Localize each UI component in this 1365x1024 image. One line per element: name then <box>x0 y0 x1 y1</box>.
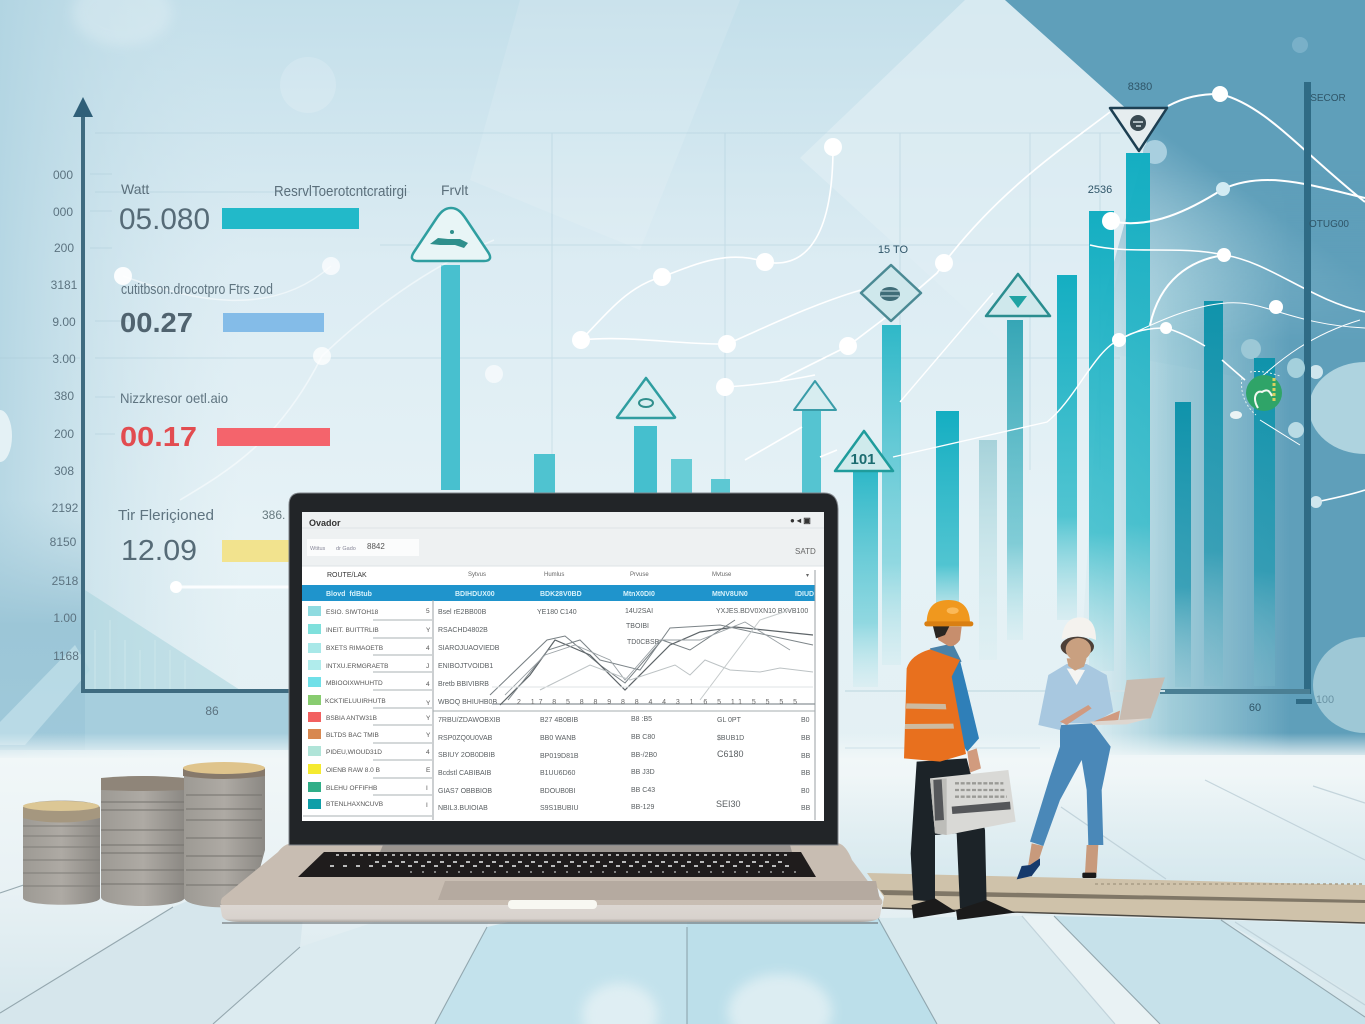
chart number labels: OTUG00 <box>1309 219 1349 230</box>
left axis labels: 3.00 <box>52 352 76 366</box>
table left rows: BSBIA ANTW31B <box>326 715 377 722</box>
table left rows: BLTDS BAC TMIB <box>326 732 379 739</box>
table right rows: S9S1BUBIU <box>540 805 579 812</box>
icon: triangle marker small <box>617 378 675 418</box>
metric: second row: 00.27 <box>120 307 193 338</box>
left axis labels: 1168 <box>53 649 79 663</box>
laptop screen: Wtitus dr Gado <box>310 546 356 552</box>
chart number labels <box>878 81 1349 714</box>
coin stacks <box>23 762 265 907</box>
table right rows: ENIBOJTVOIDB1 <box>438 663 493 670</box>
table right rows: B27 4B0BIB <box>540 717 578 724</box>
metric: fourth row <box>118 507 290 567</box>
laptop screen: SATD <box>795 547 816 556</box>
table right rows: B0 <box>801 788 810 795</box>
icon: triangle with heart <box>986 274 1050 316</box>
icon: outline triangle <box>794 381 836 410</box>
table right rows: BB C43 <box>631 787 655 794</box>
metric: second row <box>120 281 324 338</box>
laptop screen: 8842 <box>367 542 385 551</box>
table right rows: B8 :B5 <box>631 716 652 723</box>
metric: first row: Watt <box>121 181 149 197</box>
left axis labels: 3181 <box>51 278 78 292</box>
table right rows: BB C80 <box>631 734 655 741</box>
laptop screen: ● ◂ ▣ <box>790 516 811 525</box>
left bar charts vertical <box>441 265 821 494</box>
table left rows: J <box>426 663 429 670</box>
right bar charts vertical <box>853 153 1275 687</box>
table right rows: NBIL3.BUIOIAB <box>438 805 488 812</box>
laptop lid <box>289 493 838 845</box>
left axis labels <box>50 168 219 718</box>
laptop screen: Sytvus <box>468 572 486 578</box>
metric: third row: Nizzkresor oetl.aio <box>120 390 228 406</box>
table header: MtNV8UN0 <box>712 591 748 598</box>
left axis labels: 000 <box>53 205 73 219</box>
left axis labels: 200 <box>54 427 74 441</box>
laptop <box>220 493 882 923</box>
metric: first row: 05.080 <box>119 203 210 236</box>
left axis labels: 380 <box>54 389 74 403</box>
table left rows: BTENLHAXNCUVB <box>326 801 383 808</box>
table right rows: YXJES.BDV0XN10 BXVB100 <box>716 608 808 615</box>
icon: 101 triangle: 101 <box>850 451 876 468</box>
table header: MtnX0DI0 <box>623 591 655 598</box>
table right rows: Bretb BBIVIBRB <box>438 681 489 688</box>
table right rows: BB <box>801 805 811 812</box>
metric: fourth row: Tir Fleriçioned <box>118 507 214 524</box>
left axis labels: 308 <box>54 464 74 478</box>
laptop screen: ROUTE/LAK <box>327 572 367 579</box>
icon: inverted triangle marker <box>1110 108 1167 151</box>
laptop screen: Humlus <box>544 572 564 578</box>
table left rows: KCKTIELUUIRHUTB <box>325 698 386 705</box>
metric: second row: cutitbson.drocotpro Ftrs zod <box>121 281 273 298</box>
table right rows: B0 <box>801 717 810 724</box>
chart number labels: 60 <box>1249 702 1261 714</box>
left axis labels: 2518 <box>52 574 79 588</box>
table header: IDIUD <box>795 591 814 598</box>
chart number labels: 15 TO <box>878 244 909 256</box>
table right rows: Bsel rE2BB00B <box>438 609 487 616</box>
table right rows <box>438 608 811 812</box>
table left rows: Y <box>426 627 431 634</box>
laptop screen: Prvuse <box>630 572 649 578</box>
table right rows: BB <box>801 735 811 742</box>
left axis <box>73 97 291 693</box>
table right rows: C6180 <box>717 749 744 759</box>
icon: triangle marker large <box>412 208 490 261</box>
table right rows: $BUB1D <box>717 735 744 742</box>
table right rows: 7RBU/ZDAWOBXIB <box>438 717 501 724</box>
right axis <box>845 82 1312 704</box>
left axis labels: 1.00 <box>53 611 77 625</box>
chart number labels: 100 <box>1316 694 1334 706</box>
table left rows: I <box>426 802 428 809</box>
metric: third row <box>120 390 330 452</box>
background wall <box>0 0 1365 760</box>
laptop screen <box>302 512 824 821</box>
table left rows: BXETS RIMAOETB <box>326 645 383 652</box>
table left rows: 5 <box>426 608 430 615</box>
table left rows: 4 <box>426 645 430 652</box>
metric: first row: Frvlt <box>441 182 468 198</box>
table left rows: E <box>426 767 431 774</box>
table right rows: TD0CBSB <box>627 639 660 646</box>
table left rows: INEIT. BUITTRLIB <box>326 627 379 634</box>
table right rows: 14U2SAI <box>625 608 653 615</box>
worker: man with orange vest <box>904 600 1016 920</box>
table right rows: Bcdstl CABIBAIB <box>438 770 492 777</box>
table left rows: 4 <box>426 681 430 688</box>
laptop screen: Ovador <box>309 518 341 528</box>
laptop screen: ▾ <box>806 573 809 579</box>
table right rows: BB0 WANB <box>540 735 576 742</box>
table right rows: BB-129 <box>631 804 654 811</box>
icon: diamond marker <box>861 265 921 321</box>
laptop base <box>220 843 882 923</box>
left axis labels: 8150 <box>50 535 77 549</box>
table right rows: TBOIBI <box>626 623 649 630</box>
metric: fourth row: 12.09 <box>121 535 197 567</box>
table right rows: BP019D81B <box>540 753 579 760</box>
table right rows: B1UU6D60 <box>540 770 576 777</box>
floor <box>0 758 1365 1024</box>
coin stack right <box>183 762 265 907</box>
worker: woman with white hat and laptop <box>1017 617 1165 879</box>
table header: BDIHDUX00 <box>455 591 495 598</box>
table right rows: BB <box>801 753 811 760</box>
table right rows: WBOQ BHIUHB0B <box>438 699 497 706</box>
table right rows: SBIUY 2OB0DBIB <box>438 752 495 759</box>
coin stack middle <box>101 776 185 906</box>
table left rows <box>303 570 815 820</box>
left axis labels: 200 <box>54 241 74 255</box>
table left rows: MBIOOIXWHUHTD <box>326 680 383 687</box>
table header <box>302 585 815 601</box>
chart number labels: SECOR <box>1310 93 1346 104</box>
laptop screen: Mvtuse <box>712 572 732 578</box>
table right rows: BB <box>801 770 811 777</box>
icon: 101 triangle <box>835 431 893 471</box>
table left rows: ESIO. SIWTOH18 <box>326 609 379 616</box>
chart axis digits: 2 17 8 5 8 8 9 8 8 4 4 3 1 6 5 11 5 5 5 5 <box>517 699 797 706</box>
table left rows: Y <box>426 700 431 707</box>
table right rows: RSACHD4802B <box>438 627 488 634</box>
chart number labels: 2536 <box>1088 184 1112 196</box>
table right rows: SEI30 <box>716 799 741 809</box>
table left rows: 4 <box>426 749 430 756</box>
table left rows: Y <box>426 732 431 739</box>
table right rows: GL 0PT <box>717 717 742 724</box>
trend lines <box>123 94 1365 587</box>
left axis labels: 86 <box>205 704 219 718</box>
table right rows: YE180 C140 <box>537 609 577 616</box>
table left rows: BLEHU OFFIFHB <box>326 785 377 792</box>
table left rows: I <box>426 785 428 792</box>
data point dots <box>114 86 1323 593</box>
metric: third row: 00.17 <box>120 421 197 452</box>
table right rows: RSP0ZQ0U0VAB <box>438 735 493 742</box>
metric: first row: ResrvlToerotcntcratirgi <box>274 183 407 200</box>
left axis labels: 000 <box>53 168 73 182</box>
table left rows: OIENB RAW 8.0 B <box>326 767 380 774</box>
left axis labels: 2192 <box>52 501 79 515</box>
metric: first row <box>119 181 468 236</box>
table left rows: INTXU.ERMGRAETB <box>326 663 388 670</box>
table right rows: BB-/2B0 <box>631 752 657 759</box>
table right rows: BB J3D <box>631 769 655 776</box>
metric: fourth row: 386. <box>262 508 285 522</box>
icon: grey case <box>930 770 1016 835</box>
chart number labels: 8380 <box>1128 81 1152 93</box>
left axis labels: 9.00 <box>52 315 76 329</box>
coin stack left <box>23 800 100 905</box>
table right rows: BDOUB0BI <box>540 788 575 795</box>
icon: green globe <box>1230 358 1305 419</box>
table right rows: GIAS7 OBBBIOB <box>438 788 492 795</box>
table left rows: Y <box>426 715 431 722</box>
planks under workers <box>867 873 1365 923</box>
table header: Blovd fdBtub <box>326 591 372 598</box>
screen line chart <box>433 610 815 711</box>
icon: open laptop <box>1090 677 1165 725</box>
table right rows: SIAROJUAOVIEDB <box>438 645 500 652</box>
table left rows: PIDEU,WIOUD31D <box>326 749 382 756</box>
table header: BDK28V0BD <box>540 591 582 598</box>
chart grid <box>0 133 1120 748</box>
